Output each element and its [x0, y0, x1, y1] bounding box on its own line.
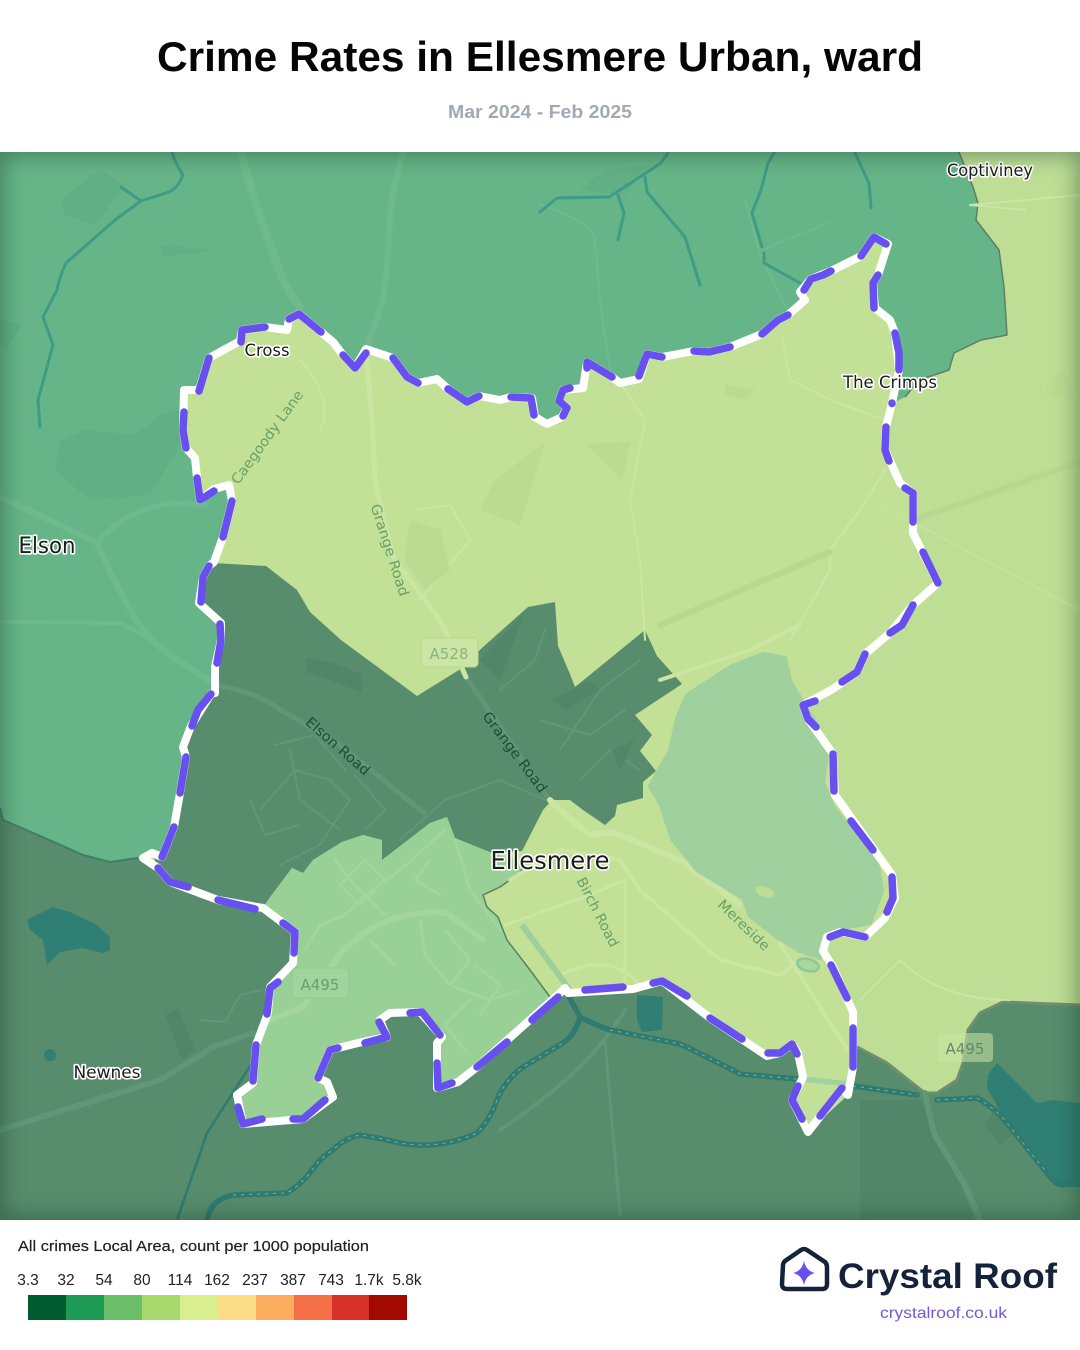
panel: map [0, 152, 1080, 1220]
place label: Coptiviney: Coptiviney [947, 161, 1033, 180]
water: lakes [27, 907, 1080, 1187]
place label: Newnes: Newnes [74, 1063, 140, 1082]
canal [207, 993, 1080, 1220]
ward boundary: white line [143, 237, 938, 1132]
legend scale values: 237 [242, 1272, 268, 1289]
southern patches [165, 1008, 1020, 1220]
darker patches in the dark area [598, 690, 626, 761]
water: narrow channel in town [522, 925, 570, 990]
streets in mid green area [270, 830, 520, 1050]
legend scale values: 743 [318, 1272, 344, 1289]
island on the lake [756, 886, 774, 898]
road label: Elson Road: Elson Road [302, 714, 373, 779]
title: Crime Rates in Ellesmere Urban, ward [157, 33, 923, 80]
ward: streets in Ellesmere town [300, 195, 1080, 1049]
streams [38, 152, 871, 427]
road label: Caegoody Lane: Caegoody Lane [228, 388, 307, 488]
edge of the southern area, right [857, 1002, 1080, 1093]
legend scale values: 1.7k [354, 1272, 384, 1289]
legend colour swatches [28, 1295, 407, 1320]
road badge: A495 west [292, 968, 349, 998]
southern green outline [0, 808, 138, 862]
region: northern and western green area [0, 152, 1007, 862]
road badge: A528: A528 [430, 645, 468, 663]
legend scale values: 5.8k [392, 1272, 422, 1289]
ward: darker fields [432, 564, 449, 584]
lake: The Mere [650, 654, 882, 958]
legend scale values: 80 [133, 1272, 151, 1289]
place label: Elson: Elson [18, 534, 76, 559]
thin waterways [176, 1063, 250, 1220]
road badge: A528 [421, 638, 478, 667]
region: mid green area in the ward [237, 817, 560, 1124]
logo URL: crystalroof.co.uk [880, 1305, 1008, 1322]
road label: Grange Road north: Grange Road [367, 502, 411, 598]
legend scale values: 162 [204, 1272, 230, 1289]
road label: Mereside: Mereside [714, 897, 773, 954]
legend scale values [17, 1272, 422, 1289]
place label: The Crimps: The Crimps [842, 373, 937, 392]
road badge: A495 west: A495 [301, 976, 339, 994]
icon: house with star [782, 1249, 827, 1289]
place label: Cross: Cross [244, 341, 290, 360]
canal towpath dots [233, 1030, 1047, 1195]
canal section crossing the ward [803, 1079, 848, 1084]
region edge line [905, 152, 1007, 397]
wide road on the right [657, 549, 833, 628]
road badge: A495 east: A495 [946, 1040, 984, 1058]
legend scale values: 387 [280, 1272, 306, 1289]
subtitle: date range: Mar 2024 - Feb 2025 [448, 101, 632, 122]
place label: Ellesmere: Ellesmere [490, 846, 610, 875]
legend [17, 1238, 422, 1320]
region: ward light green [143, 237, 938, 1132]
map edge vignette [0, 152, 1080, 1220]
faint road on the east side [870, 500, 1080, 610]
region: southern dark green area [0, 808, 1080, 1220]
legend scale values: 3.3 [17, 1272, 39, 1289]
road badge: A495 east [946, 1033, 993, 1062]
legend scale values: 114 [168, 1272, 193, 1289]
road label: Grange Road south: Grange Road [479, 709, 550, 796]
pond beside the lake [796, 956, 820, 974]
map background: surrounding low-crime area [808, 152, 1080, 1116]
roads on the green area [0, 153, 830, 683]
legend title: All crimes Local Area, count per 1000 population [18, 1238, 369, 1255]
top-area darker patches [0, 165, 650, 500]
logo: Crystal Roof [782, 1249, 1057, 1322]
ward boundary: purple dashes [158, 237, 938, 1124]
logo wordmark: Crystal Roof [838, 1257, 1057, 1296]
southern road [0, 990, 980, 1220]
ward: Ellesmere town edge [483, 862, 550, 997]
road label: Birch Road: Birch Road [573, 875, 621, 950]
region: high-crime dark area in the ward [152, 563, 682, 908]
legend scale values: 32 [57, 1272, 75, 1289]
legend scale values: 54 [95, 1272, 113, 1289]
streets in the dark area [215, 630, 640, 865]
